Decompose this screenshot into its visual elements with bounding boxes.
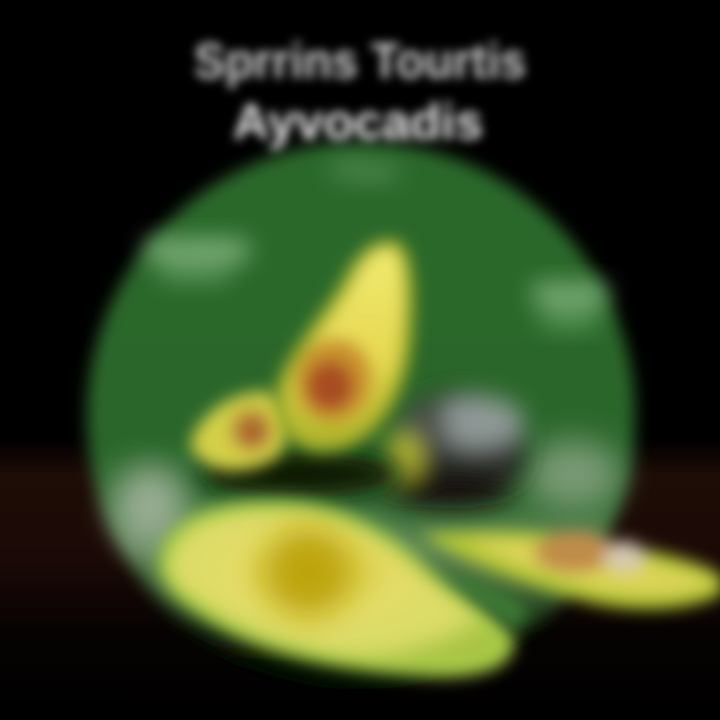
- label: upper right benefit: [532, 282, 608, 328]
- label: upper left benefit: Healthy: [149, 236, 243, 266]
- label: top of circle: Fiber: [332, 155, 400, 186]
- icon: large avocado half in foreground: [158, 500, 514, 677]
- icon: small avocado half: [190, 392, 288, 470]
- label: lower right benefit: [526, 438, 622, 510]
- title: Ayvocadis: [233, 94, 483, 150]
- label: upper left benefit: [145, 236, 250, 282]
- title: [194, 33, 526, 150]
- shadow below avocados: [200, 452, 400, 496]
- label: lower right benefit: Heart: [546, 460, 603, 485]
- icon: sliced avocado at right: [420, 531, 720, 630]
- title: Sprrins Tourtis: [194, 33, 526, 89]
- icon: upright avocado half: [275, 239, 414, 452]
- icon: dark whole avocado: [386, 392, 526, 508]
- green circle panel: [87, 142, 635, 690]
- icon: large avocado pit hollow: [264, 528, 352, 616]
- label: lower left benefit: Skin: [127, 492, 173, 517]
- label: upper right benefit: Vitamin: [534, 285, 606, 307]
- label: lower left benefit: [112, 464, 188, 548]
